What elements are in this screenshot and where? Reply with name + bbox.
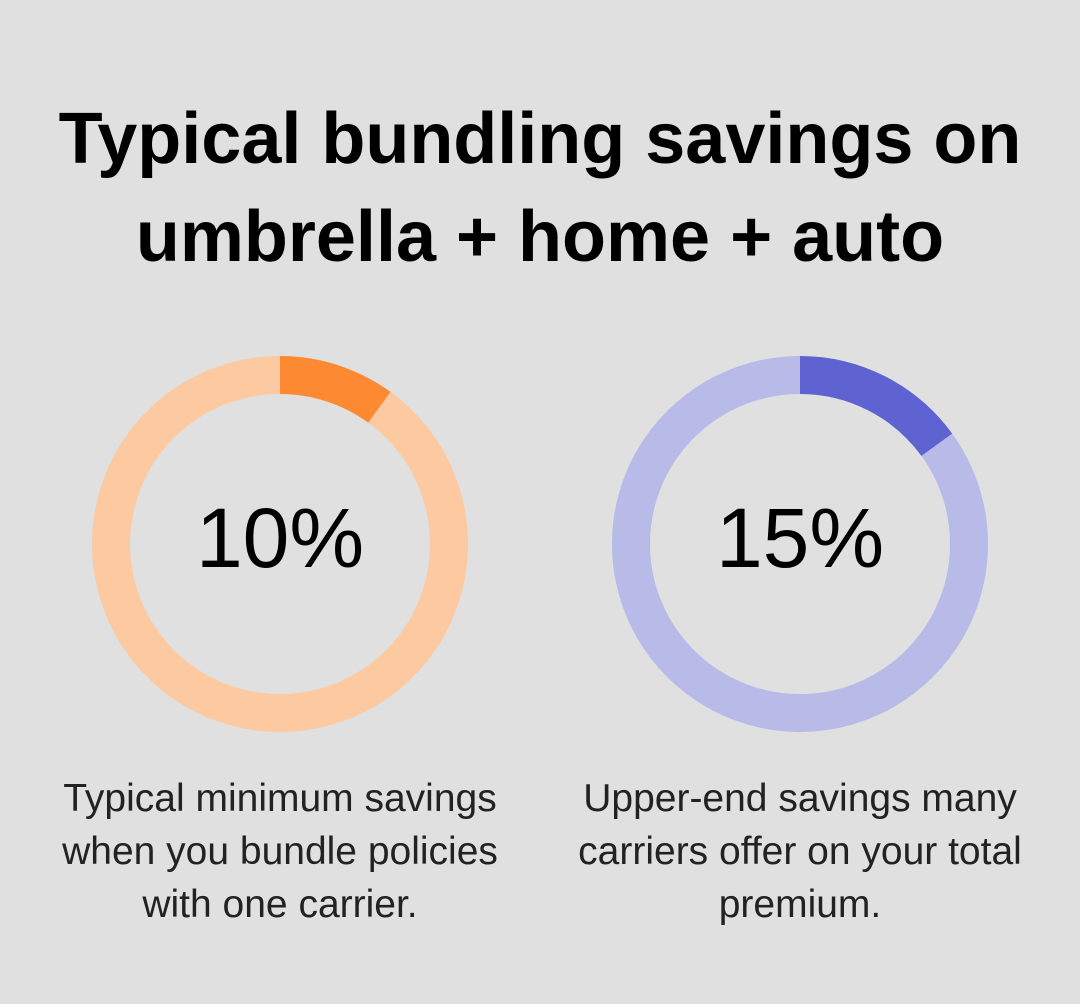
value: 10%: 10%	[196, 491, 364, 585]
value: 15%: 15%	[716, 491, 884, 585]
title: umbrella + home + auto	[136, 197, 944, 277]
caption: right: premium.	[719, 883, 881, 926]
caption: left: when you bundle policies	[62, 830, 498, 873]
caption: right	[578, 777, 1022, 926]
donut: 15%	[612, 356, 988, 732]
caption: left: with one carrier.	[142, 883, 418, 926]
caption: right: carriers offer on your total	[578, 830, 1022, 873]
caption: left	[62, 777, 498, 926]
caption: right: Upper-end savings many	[583, 777, 1017, 820]
title	[59, 99, 1021, 277]
title: Typical bundling savings on	[59, 99, 1021, 179]
caption: left: Typical minimum savings	[63, 777, 497, 820]
donut: 10%	[92, 356, 468, 732]
